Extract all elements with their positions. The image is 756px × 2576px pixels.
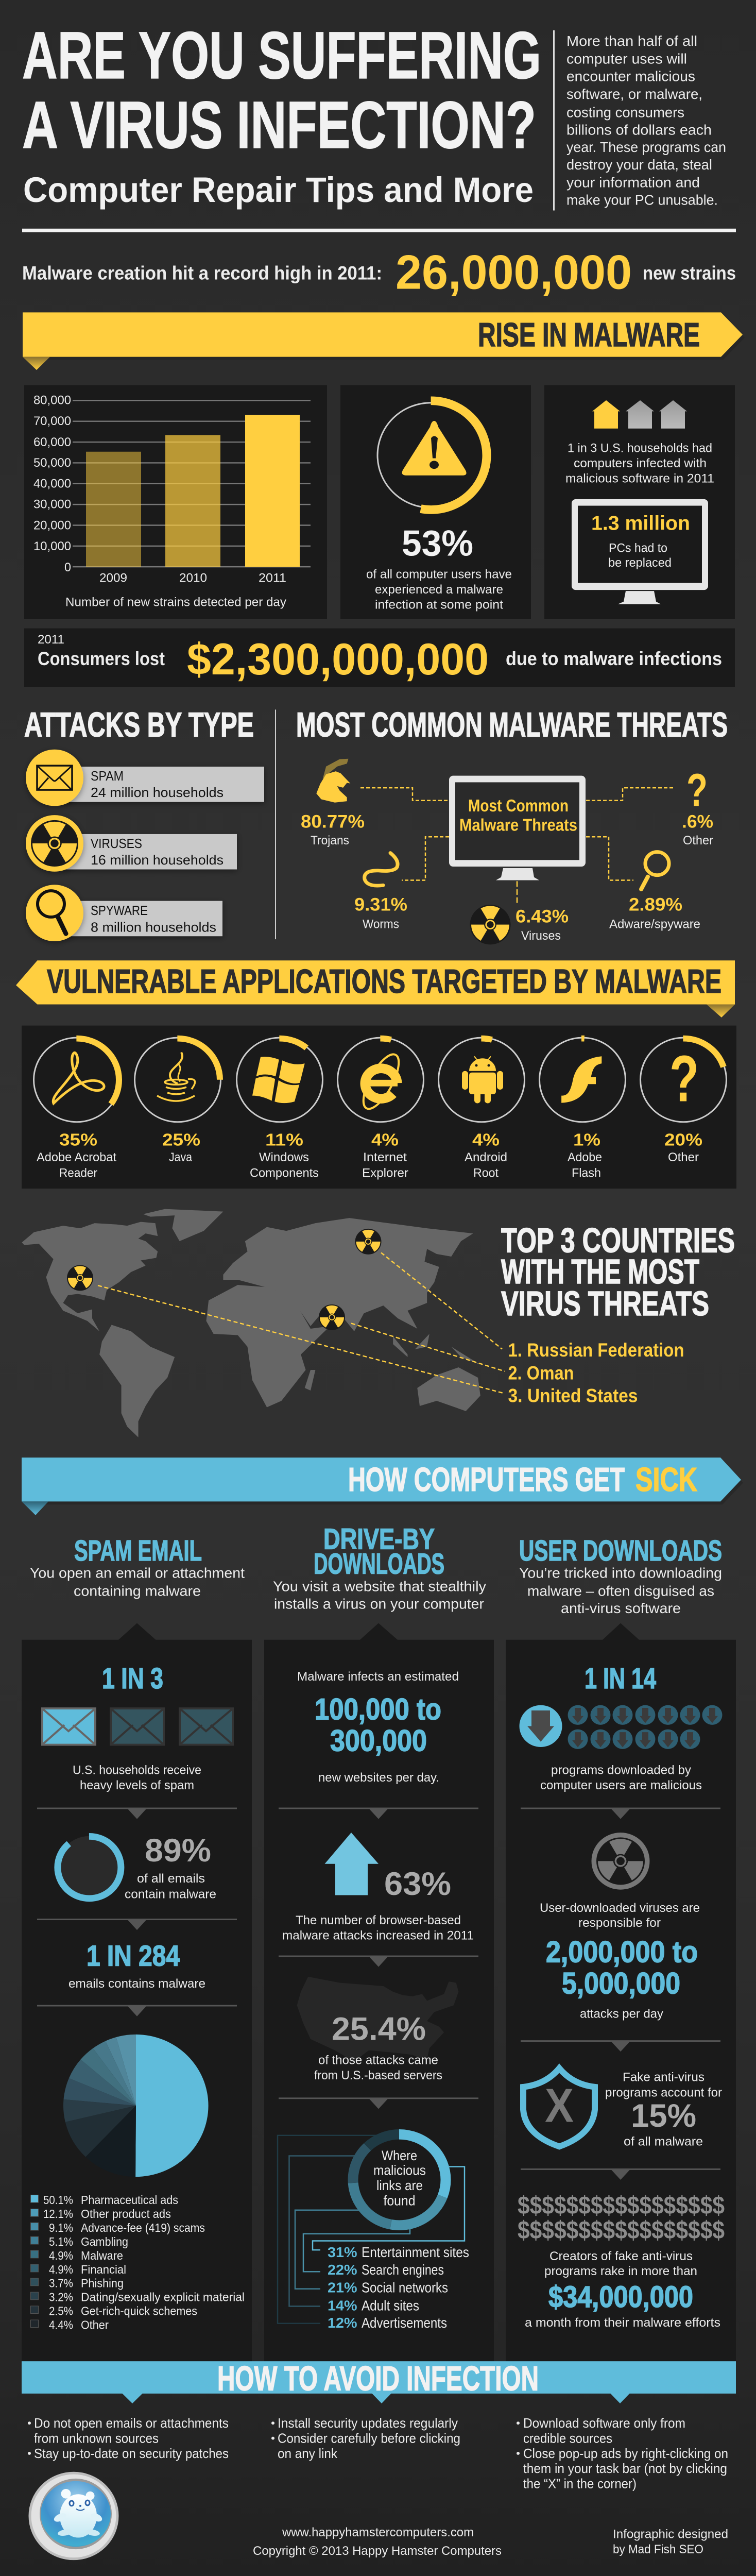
stat: 63%: [282, 1867, 474, 1943]
stat: 89%: 89%: [145, 1833, 211, 1869]
threat: adware: 2.89%: [629, 894, 682, 915]
column: user downloads: [506, 1623, 736, 2362]
panel: consumers lost: $2,300,000,000: [187, 635, 489, 684]
icon: trojan horse: [316, 759, 350, 803]
caption: [73, 1764, 201, 1792]
heading: attacks by type: ATTACKS BY TYPE: [24, 706, 254, 744]
stat: 63%: malware attacks increased in 2011: [282, 1929, 474, 1943]
attack: viruses: 16 million households: [91, 853, 224, 868]
application: Android Root: Android: [465, 1150, 507, 1164]
threat: adware: [609, 852, 700, 931]
households text: 1 in 3 U.S. households had: [568, 441, 712, 455]
tips: column 3: Close pop-up ads by right-clicking on: [523, 2447, 728, 2461]
stat: 1 in 284: [68, 1940, 205, 1991]
intro text: destroy your data, steal: [566, 157, 712, 173]
stat: 89%: [125, 1833, 216, 1901]
caption: heavy levels of spam: [80, 1778, 194, 1792]
dollar signs: $$$$$$$$$$$$$$$$$: [518, 2192, 725, 2219]
threat: trojans: Trojans: [311, 834, 349, 848]
axis labels: 80,000: [33, 394, 71, 408]
stat: 25.4%: [314, 2011, 442, 2082]
column: spam email: [22, 1623, 252, 2362]
axis labels: 2010: [179, 571, 207, 585]
application: Adobe Acrobat Reader: Reader: [59, 1166, 97, 1180]
icon: internet explorer: [356, 1049, 406, 1113]
banner: how computers get sick: SICK: [635, 1461, 697, 1498]
stat: 63%: The number of browser-based: [296, 1913, 461, 1927]
application: Android Root: [439, 1038, 524, 1180]
intro text: computer uses will: [566, 51, 687, 66]
intro: spam email: SPAM EMAIL: [74, 1535, 202, 1567]
icon: envelopes: [42, 1708, 233, 1745]
icon: shield: [523, 2068, 595, 2146]
banner: how computers get sick: [22, 1458, 743, 1515]
record high statement: [22, 245, 736, 299]
application: Other: 20%: [664, 1131, 702, 1150]
stat: 15%: Fake anti-virus: [623, 2071, 705, 2084]
intro: user downloads: anti-virus software: [561, 1600, 681, 1616]
monitor title: Malware Threats: [459, 816, 577, 835]
title: ARE YOU SUFFERING: [22, 18, 541, 93]
stat: 89%: contain malware: [125, 1888, 216, 1901]
column: drive-by downloads: [264, 1623, 494, 2362]
icon: radiation: [30, 822, 79, 863]
dollar signs: $$$$$$$$$$$$$$$$$: [518, 2216, 725, 2244]
stat: 1 in 284: 1 IN 284: [87, 1940, 180, 1973]
axis labels: 40,000: [33, 477, 71, 490]
panel: 53 percent: [340, 385, 531, 619]
footer: website and copyright: www.happyhamstercomputers.com: [282, 2526, 474, 2539]
pie legend: 5.1%: [49, 2235, 73, 2248]
caption: experienced a malware: [375, 583, 503, 597]
threat: other: [682, 765, 713, 848]
icon: acrobat: [53, 1053, 104, 1103]
banner: rise in malware: [23, 312, 745, 370]
stat: attacks per day: 5,000,000: [562, 1966, 680, 2000]
threat: other: Other: [683, 834, 713, 848]
application: Internet Explorer: Internet: [363, 1150, 407, 1164]
panel: consumers lost: [24, 629, 735, 687]
stat: new websites: 100,000 to: [315, 1692, 441, 1726]
map connector lines: [98, 1252, 505, 1394]
attack: viruses: VIRUSES: [91, 837, 142, 851]
tips: column 2: Consider carefully before clicking: [278, 2432, 460, 2446]
stat: attacks per day: User-downloaded viruses are: [540, 1901, 700, 1915]
subtitle: Computer Repair Tips and More: [23, 170, 534, 210]
attack: spam: 24 million households: [91, 786, 224, 800]
intro text: encounter malicious: [566, 69, 695, 84]
ring gauge: [375, 401, 487, 510]
pie legend: Malware: [81, 2249, 123, 2262]
link sources list: Advertisements: [362, 2315, 447, 2331]
icon: question mark: ?: [669, 1043, 699, 1115]
panel: consumers lost: 2011: [38, 633, 64, 647]
world map: [22, 1209, 480, 1437]
axis labels: 10,000: [33, 539, 71, 553]
application: Internet Explorer: Explorer: [362, 1166, 408, 1180]
stat: attacks per day: attacks per day: [580, 2007, 664, 2021]
application: Windows Components: 11%: [265, 1131, 303, 1150]
link sources list: Entertainment sites: [362, 2244, 469, 2260]
tips: column 3: credible sources: [523, 2432, 612, 2446]
application: Adobe Flash: [540, 1038, 625, 1180]
pie legend: [31, 2193, 245, 2332]
application: Java: [135, 1038, 220, 1164]
households text: [565, 441, 714, 485]
application: Android Root: Root: [473, 1166, 499, 1180]
threat: viruses: Viruses: [521, 929, 561, 943]
attack: viruses: [26, 815, 237, 872]
attack: spam: SPAM: [91, 769, 124, 784]
tips: column 2: [271, 2416, 460, 2461]
intro: drive-by downloads: DRIVE-BY: [323, 1523, 435, 1555]
icon: question mark: ?: [686, 765, 708, 816]
pie legend: 4.9%: [49, 2249, 73, 2262]
icon: radiation: [469, 906, 511, 942]
intro: drive-by downloads: installs a virus on your computer: [274, 1596, 484, 1612]
stat: 15%: 15%: [631, 2098, 696, 2134]
map pins: [66, 1229, 382, 1330]
threat: worms: 9.31%: [354, 894, 407, 915]
intro text: billions of dollars each: [566, 122, 712, 138]
stat: 63%: 63%: [384, 1867, 451, 1902]
application: Other: [641, 1038, 726, 1164]
application: Android Root: 4%: [472, 1131, 500, 1150]
pie chart: [63, 2035, 209, 2177]
donut title: links are: [376, 2178, 423, 2193]
icon: download circles: [519, 1705, 722, 1749]
country list: 2. Oman: [508, 1362, 574, 1383]
intro text: [566, 33, 726, 208]
stat: new websites: Malware infects an estimated: [297, 1670, 459, 1684]
intro: spam email: You open an email or attachment: [30, 1565, 245, 1581]
intro text: year. These programs can: [566, 139, 726, 155]
intro text: your information and: [566, 175, 700, 190]
stat: 1 in 3: 1 IN 3: [102, 1662, 163, 1695]
threat: worms: [354, 853, 407, 931]
threat: other: .6%: [682, 811, 713, 832]
caption: programs downloaded by: [551, 1764, 692, 1777]
record high statement: 26,000,000: [396, 245, 632, 299]
attack: spam: [26, 750, 264, 806]
country list: [508, 1340, 684, 1406]
stat: 1.3 million: 1.3 million: [591, 512, 690, 535]
stat: attacks per day: [540, 1901, 700, 2021]
pie legend: Dating/sexually explicit material: [81, 2291, 245, 2304]
panel: consumers lost: due to malware infections: [506, 648, 722, 669]
panel: bar chart of new strains: [24, 385, 327, 619]
application: Other: Other: [668, 1150, 699, 1164]
pie legend: 9.1%: [49, 2221, 73, 2234]
axis labels: 70,000: [33, 414, 71, 428]
hamster: [53, 2489, 104, 2538]
application: Adobe Flash: 1%: [573, 1131, 600, 1150]
pie legend: Advance-fee (419) scams: [81, 2221, 205, 2234]
pie legend: Other: [81, 2318, 109, 2332]
application: Adobe Acrobat Reader: Adobe Acrobat: [37, 1150, 116, 1164]
icon: windows flag: [252, 1057, 305, 1103]
threat: trojans: 80.77%: [301, 811, 365, 832]
intro text: make your PC unusable.: [566, 192, 718, 208]
application: Java: Java: [169, 1150, 192, 1164]
chart caption: Number of new strains detected per day: [65, 596, 287, 609]
axis labels: 50,000: [33, 456, 71, 470]
application: Internet Explorer: 4%: [371, 1131, 399, 1150]
heading: top 3 countries: [501, 1222, 735, 1323]
tips: column 3: the “X” in the corner): [523, 2477, 637, 2491]
application: Adobe Flash: Adobe: [568, 1150, 602, 1164]
icon: flash: [561, 1056, 602, 1103]
icon: grey radiation: [591, 1833, 650, 1890]
tips: column 1: Do not open emails or attachments: [34, 2416, 229, 2431]
panel: consumers lost: Consumers lost: [38, 648, 165, 669]
intro text: software, or malware,: [566, 86, 702, 102]
bar: 2009: [86, 452, 141, 567]
threat: viruses: [469, 905, 569, 944]
intro: user downloads: malware – often disguised as: [527, 1583, 714, 1599]
title: A VIRUS INFECTION?: [22, 88, 536, 162]
attack: spyware: [26, 885, 222, 941]
axis labels: 2009: [99, 571, 127, 585]
axis labels: 0: [64, 561, 71, 574]
tips: column 1: Stay up-to-date on security patches: [34, 2447, 229, 2461]
donut chart: malicious links: [353, 2134, 446, 2225]
intro text: More than half of all: [566, 33, 697, 49]
tips: column 3: Download software only from: [523, 2416, 685, 2431]
application: Adobe Acrobat Reader: 35%: [59, 1131, 97, 1150]
stat: 34 million: $34,000,000: [548, 2279, 693, 2314]
footer: designer credit: [613, 2528, 728, 2556]
pie legend: 3.2%: [49, 2291, 73, 2304]
threat: worms: Worms: [363, 918, 399, 931]
banner: how computers get sick: HOW COMPUTERS GET: [348, 1461, 625, 1498]
donut title: malicious: [373, 2163, 426, 2178]
pie legend: 4.4%: [49, 2318, 73, 2332]
pie legend: 3.7%: [49, 2277, 73, 2290]
icon: magnifier: [641, 852, 669, 889]
caption: computer users are malicious: [540, 1778, 702, 1792]
intro: drive-by downloads: [273, 1523, 486, 1612]
stat: 34 million: a month from their malware efforts: [525, 2316, 720, 2330]
application: Internet Explorer: [338, 1038, 423, 1180]
intro: spam email: [30, 1535, 245, 1599]
icon: java cup: [157, 1053, 195, 1101]
footer: website and copyright: [253, 2526, 502, 2558]
axis labels: 2011: [259, 571, 286, 585]
pie legend: Get-rich-quick schemes: [81, 2304, 197, 2317]
attack: spyware: SPYWARE: [91, 904, 148, 918]
link sources list: Social networks: [362, 2280, 448, 2295]
axis labels: [33, 394, 286, 585]
households text: malicious software in 2011: [565, 472, 714, 485]
banner: vulnerable applications: [16, 960, 735, 1018]
icon: envelope: [37, 766, 72, 790]
stat: new websites: new websites per day.: [318, 1771, 439, 1785]
application: Adobe Acrobat Reader: [34, 1038, 119, 1180]
tips: column 2: on any link: [278, 2447, 337, 2461]
ring: 89 percent: [57, 1836, 121, 1899]
pie legend: Financial: [81, 2263, 126, 2276]
stat: attacks per day: responsible for: [578, 1916, 661, 1930]
caption: [540, 1764, 702, 1792]
pie legend: Phishing: [81, 2277, 124, 2290]
link sources list: 14%: [328, 2298, 357, 2313]
panel: households and PCs replaced: [544, 385, 735, 619]
stat: attacks per day: 2,000,000 to: [546, 1935, 698, 1969]
monitor caption: PCs had to: [609, 541, 667, 555]
country list: 1. Russian Federation: [508, 1340, 684, 1361]
tips: column 3: them in your task bar (not by clicking: [523, 2462, 727, 2476]
icon: android: [462, 1056, 503, 1103]
application: Windows Components: Windows: [259, 1150, 309, 1164]
pie legend: Pharmaceutical ads: [81, 2193, 178, 2207]
pie legend: Gambling: [81, 2235, 128, 2248]
households text: computers infected with: [574, 456, 707, 470]
threat: trojans: [301, 759, 365, 848]
connector lines: [278, 2136, 465, 2324]
caption: [366, 568, 512, 612]
attack: spyware: 8 million households: [91, 921, 216, 935]
pie legend: 2.5%: [49, 2304, 73, 2317]
pie legend: 50.1%: [43, 2193, 73, 2207]
application: Adobe Flash: Flash: [572, 1166, 601, 1180]
country list: 3. United States: [508, 1385, 638, 1406]
axis labels: 30,000: [33, 498, 71, 511]
footer: designer credit: by Mad Fish SEO: [613, 2543, 703, 2556]
link sources list: 31%: [328, 2244, 357, 2260]
caption: of all computer users have: [366, 568, 512, 582]
link sources list: 12%: [328, 2315, 357, 2331]
intro: user downloads: [519, 1535, 722, 1616]
application: Windows Components: [237, 1038, 322, 1180]
stat: new websites: [297, 1670, 459, 1785]
intro: user downloads: You’re tricked into downloading: [519, 1565, 722, 1581]
stat: 89%: of all emails: [137, 1872, 205, 1886]
icon: monitor: [572, 499, 708, 604]
pie legend: 4.9%: [49, 2263, 73, 2276]
link sources list: Search engines: [362, 2262, 444, 2278]
stat: 34 million: [525, 2249, 720, 2330]
stat: 15%: of all malware: [624, 2135, 703, 2148]
pie legend: Other product ads: [81, 2207, 171, 2221]
application: Windows Components: Components: [250, 1166, 319, 1180]
banner: how to avoid infection: HOW TO AVOID INFECTION: [217, 2360, 539, 2398]
stat: 34 million: Creators of fake anti-virus: [549, 2249, 693, 2263]
donut title: Where: [382, 2148, 417, 2163]
bar: 2010: [165, 435, 220, 567]
tips: column 1: from unknown sources: [34, 2432, 159, 2446]
monitor caption: be replaced: [608, 556, 672, 570]
stat: 34 million: programs rake in more than: [544, 2264, 697, 2278]
record high statement: Malware creation hit a record high in 2011:: [22, 262, 382, 284]
axis labels: 60,000: [33, 435, 71, 449]
banner: how to avoid infection: [22, 2360, 736, 2403]
stat: 1 in 14: 1 IN 14: [585, 1662, 656, 1695]
stat: 15%: [605, 2071, 722, 2148]
footer: designer credit: Infographic designed: [613, 2528, 728, 2541]
logo: happy hamster: [30, 2473, 117, 2559]
link sources list: [328, 2244, 469, 2331]
icon: warning triangle: [402, 421, 467, 476]
intro: drive-by downloads: DOWNLOADS: [314, 1548, 444, 1580]
bar: 2011: [245, 415, 300, 567]
stat: 25.4%: from U.S.-based servers: [314, 2069, 442, 2082]
stat: 15%: programs account for: [605, 2086, 722, 2099]
icon: houses: [592, 400, 687, 429]
link sources list: 22%: [328, 2262, 357, 2278]
pie legend: 12.1%: [43, 2207, 73, 2221]
monitor caption: [608, 541, 672, 570]
icon: up arrow: [324, 1833, 379, 1895]
icon: central monitor: [449, 776, 586, 880]
icon: worm: [365, 853, 398, 886]
monitor title: Most Common: [468, 797, 569, 816]
dashed connectors: [360, 788, 675, 904]
record high statement: new strains: [643, 262, 736, 284]
stat: 53%: 53%: [402, 523, 473, 564]
application: Java: 25%: [162, 1131, 200, 1150]
intro: spam email: containing malware: [74, 1583, 201, 1599]
tips: column 3: [517, 2416, 728, 2491]
map: USA: [297, 1977, 458, 2062]
intro: drive-by downloads: You visit a website that stealthily: [273, 1579, 486, 1595]
axis labels: 20,000: [33, 519, 71, 533]
threat: viruses: 6.43%: [516, 906, 569, 926]
icon: magnifier: [38, 891, 66, 934]
caption: infection at some point: [375, 598, 503, 612]
threat: adware: Adware/spyware: [609, 918, 700, 931]
tips: column 2: Install security updates regularly: [278, 2416, 458, 2431]
monitor title: [459, 797, 577, 835]
stat: 1 in 284: emails contains malware: [68, 1977, 205, 1991]
donut title: found: [383, 2193, 415, 2208]
dollar signs: [518, 2192, 725, 2244]
footer: website and copyright: Copyright © 2013 Happy Hamster Computers: [253, 2544, 502, 2558]
title: [22, 18, 541, 162]
stat: 25.4%: of those attacks came: [318, 2054, 438, 2067]
link sources list: Adult sites: [362, 2298, 419, 2313]
caption: U.S. households receive: [73, 1764, 201, 1777]
panel: vulnerable applications: [22, 1026, 736, 1189]
stat: 25.4%: 25.4%: [332, 2011, 426, 2047]
intro text: costing consumers: [566, 105, 684, 120]
link sources list: 21%: [328, 2280, 357, 2295]
tips: column 1: [28, 2416, 229, 2461]
icon: shield: X: [545, 2078, 574, 2132]
donut title: [373, 2148, 426, 2208]
stat: new websites: 300,000: [330, 1723, 427, 1757]
